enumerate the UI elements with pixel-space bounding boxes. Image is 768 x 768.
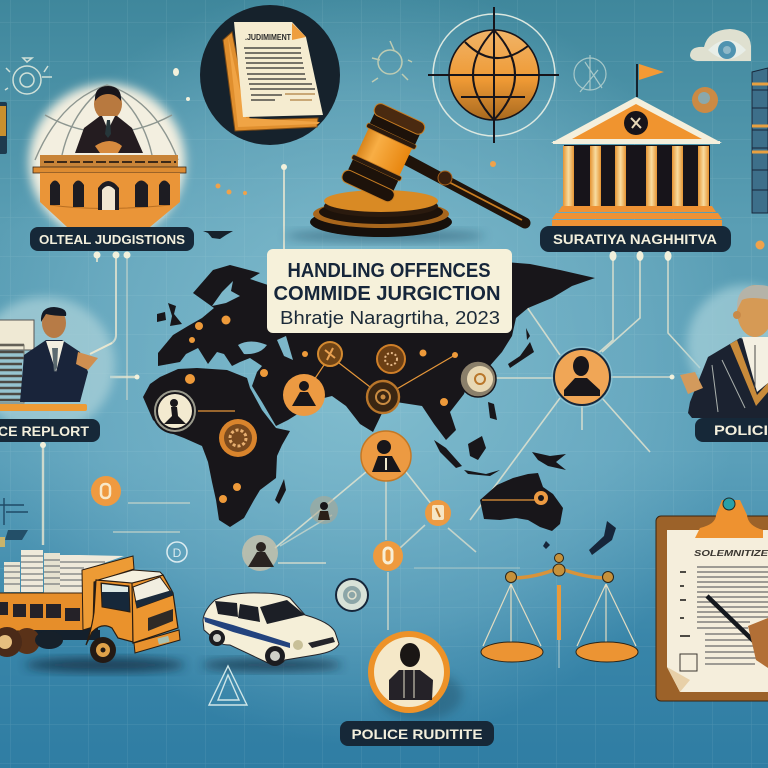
map node: faded person above car (242, 535, 278, 571)
map node: emblem circle (336, 579, 368, 611)
pen and hand (707, 596, 768, 655)
map: Southeast Asia islands (434, 402, 566, 476)
document stack illustration (200, 5, 340, 145)
map: Madagascar (275, 479, 286, 504)
cab roof (98, 570, 163, 583)
car shadow (202, 659, 342, 671)
clipboard board (656, 516, 768, 701)
scales of justice (481, 554, 638, 668)
world map (143, 262, 616, 555)
small white dots (40, 68, 674, 448)
label: police right pill (695, 418, 768, 442)
icon: sun outline near globe (372, 41, 412, 82)
gavel base (310, 207, 452, 237)
map node: person in Middle East (283, 374, 325, 416)
map: New Zealand (543, 521, 616, 555)
map node: China emblem (377, 345, 405, 373)
gavel illustration (285, 101, 525, 242)
label: police right pill: POLICI (714, 422, 768, 438)
police car illustration (202, 593, 342, 671)
clipboard heading: SOLEMNITIZE (694, 549, 768, 558)
label: building pill: SURATIYA NAGHHITVA (553, 232, 717, 247)
connector network lines (43, 167, 700, 630)
map node: Central Asia emblem (318, 342, 342, 366)
car windows (215, 600, 305, 624)
map node: emblem in Africa (219, 419, 257, 457)
icon: right edge tower (752, 68, 768, 213)
courthouse building (33, 155, 186, 227)
top-left courthouse illustration (29, 84, 186, 240)
label: bottom pill (340, 721, 494, 746)
map: Africa (143, 368, 290, 527)
car wheels (209, 630, 225, 646)
bumper (134, 630, 180, 653)
judge figure (75, 86, 143, 153)
title card: COMMIDE JURGICTION (274, 283, 500, 305)
label: police report pill (0, 419, 100, 442)
map node: large person on right (552, 347, 612, 407)
big bottom person badge (368, 631, 462, 720)
official figure (680, 285, 768, 418)
map: Australia (480, 473, 563, 531)
gavel handle (407, 160, 525, 223)
globe wire lines (35, 85, 178, 160)
map node: India emblem (367, 381, 399, 413)
icon: triangle outline (209, 666, 247, 705)
halo dome (29, 84, 185, 240)
icon: orange badge right (692, 87, 718, 113)
title card: HANDLING OFFENCES (288, 260, 490, 282)
truck shadow (25, 658, 185, 672)
map: orange location dots (185, 316, 458, 503)
cab front (132, 575, 178, 643)
title card: Bhratje Naragrtiha, 2023 (280, 308, 500, 328)
map: Eurasia (158, 262, 595, 440)
icon: left edge boats (0, 498, 28, 547)
car body (203, 593, 339, 664)
paper stack (0, 320, 34, 403)
map: Baltic, Black Sea and Caspian (212, 281, 293, 360)
paper load (4, 550, 124, 594)
map node: figure at west Africa (152, 388, 198, 434)
map node: faded person south of Africa (310, 496, 338, 524)
icon: cloud with eye (690, 29, 751, 61)
official figure (20, 307, 112, 402)
dark chassis (30, 580, 100, 640)
label: building pill (540, 226, 731, 252)
panel: left official with report (0, 297, 115, 433)
map node: East Asia badge (460, 361, 496, 397)
icon: sun outline left (5, 58, 52, 94)
car front (308, 637, 335, 648)
document stack illustration: .JUDIMIMENT (245, 33, 291, 42)
panel: right police official (680, 285, 768, 418)
label: courthouse pill: OLTEAL JUDGISTIONS (39, 232, 185, 247)
globe with crosshair (428, 7, 559, 143)
truck illustration (0, 550, 185, 672)
map: Japan (508, 328, 534, 368)
small decorative marks (216, 161, 764, 250)
cab side (86, 580, 133, 645)
clipboard paper (667, 530, 768, 692)
map node: Indian Ocean person (361, 431, 411, 481)
title card (267, 249, 512, 333)
clipboard text lines (697, 567, 768, 664)
map node: orange badge left (91, 476, 121, 506)
label: bottom pill: POLICE RUDITITE (352, 727, 482, 742)
blue stripe (204, 617, 290, 648)
clipboard stamp (680, 654, 697, 671)
soft backdrop (0, 297, 115, 433)
icon: letter D badge (167, 542, 187, 562)
clipboard clip (695, 500, 763, 538)
grille (148, 609, 173, 631)
clipboard with signing hand (656, 498, 768, 701)
gavel head (340, 101, 428, 204)
icon: faint emblem right of globe (574, 55, 606, 92)
label: courthouse pill (30, 227, 194, 251)
map node: document badge (425, 500, 451, 526)
soft backdrop (687, 285, 768, 405)
icon: left edge device (0, 102, 7, 154)
desk (0, 404, 87, 411)
windscreen (133, 577, 173, 608)
building with flag (551, 64, 722, 226)
map: orange route lines (196, 355, 535, 500)
map node: lower badge (373, 541, 403, 571)
side window (101, 583, 130, 612)
icon: letter D badge: D (173, 546, 182, 560)
truck wheels (0, 627, 116, 663)
map node: Australia marker (534, 491, 548, 505)
gavel shadow (285, 230, 485, 242)
cab back wall (82, 556, 134, 630)
small dark bird mark (203, 231, 233, 239)
cargo bed (0, 593, 84, 631)
map: Britain and Ireland (157, 303, 182, 326)
